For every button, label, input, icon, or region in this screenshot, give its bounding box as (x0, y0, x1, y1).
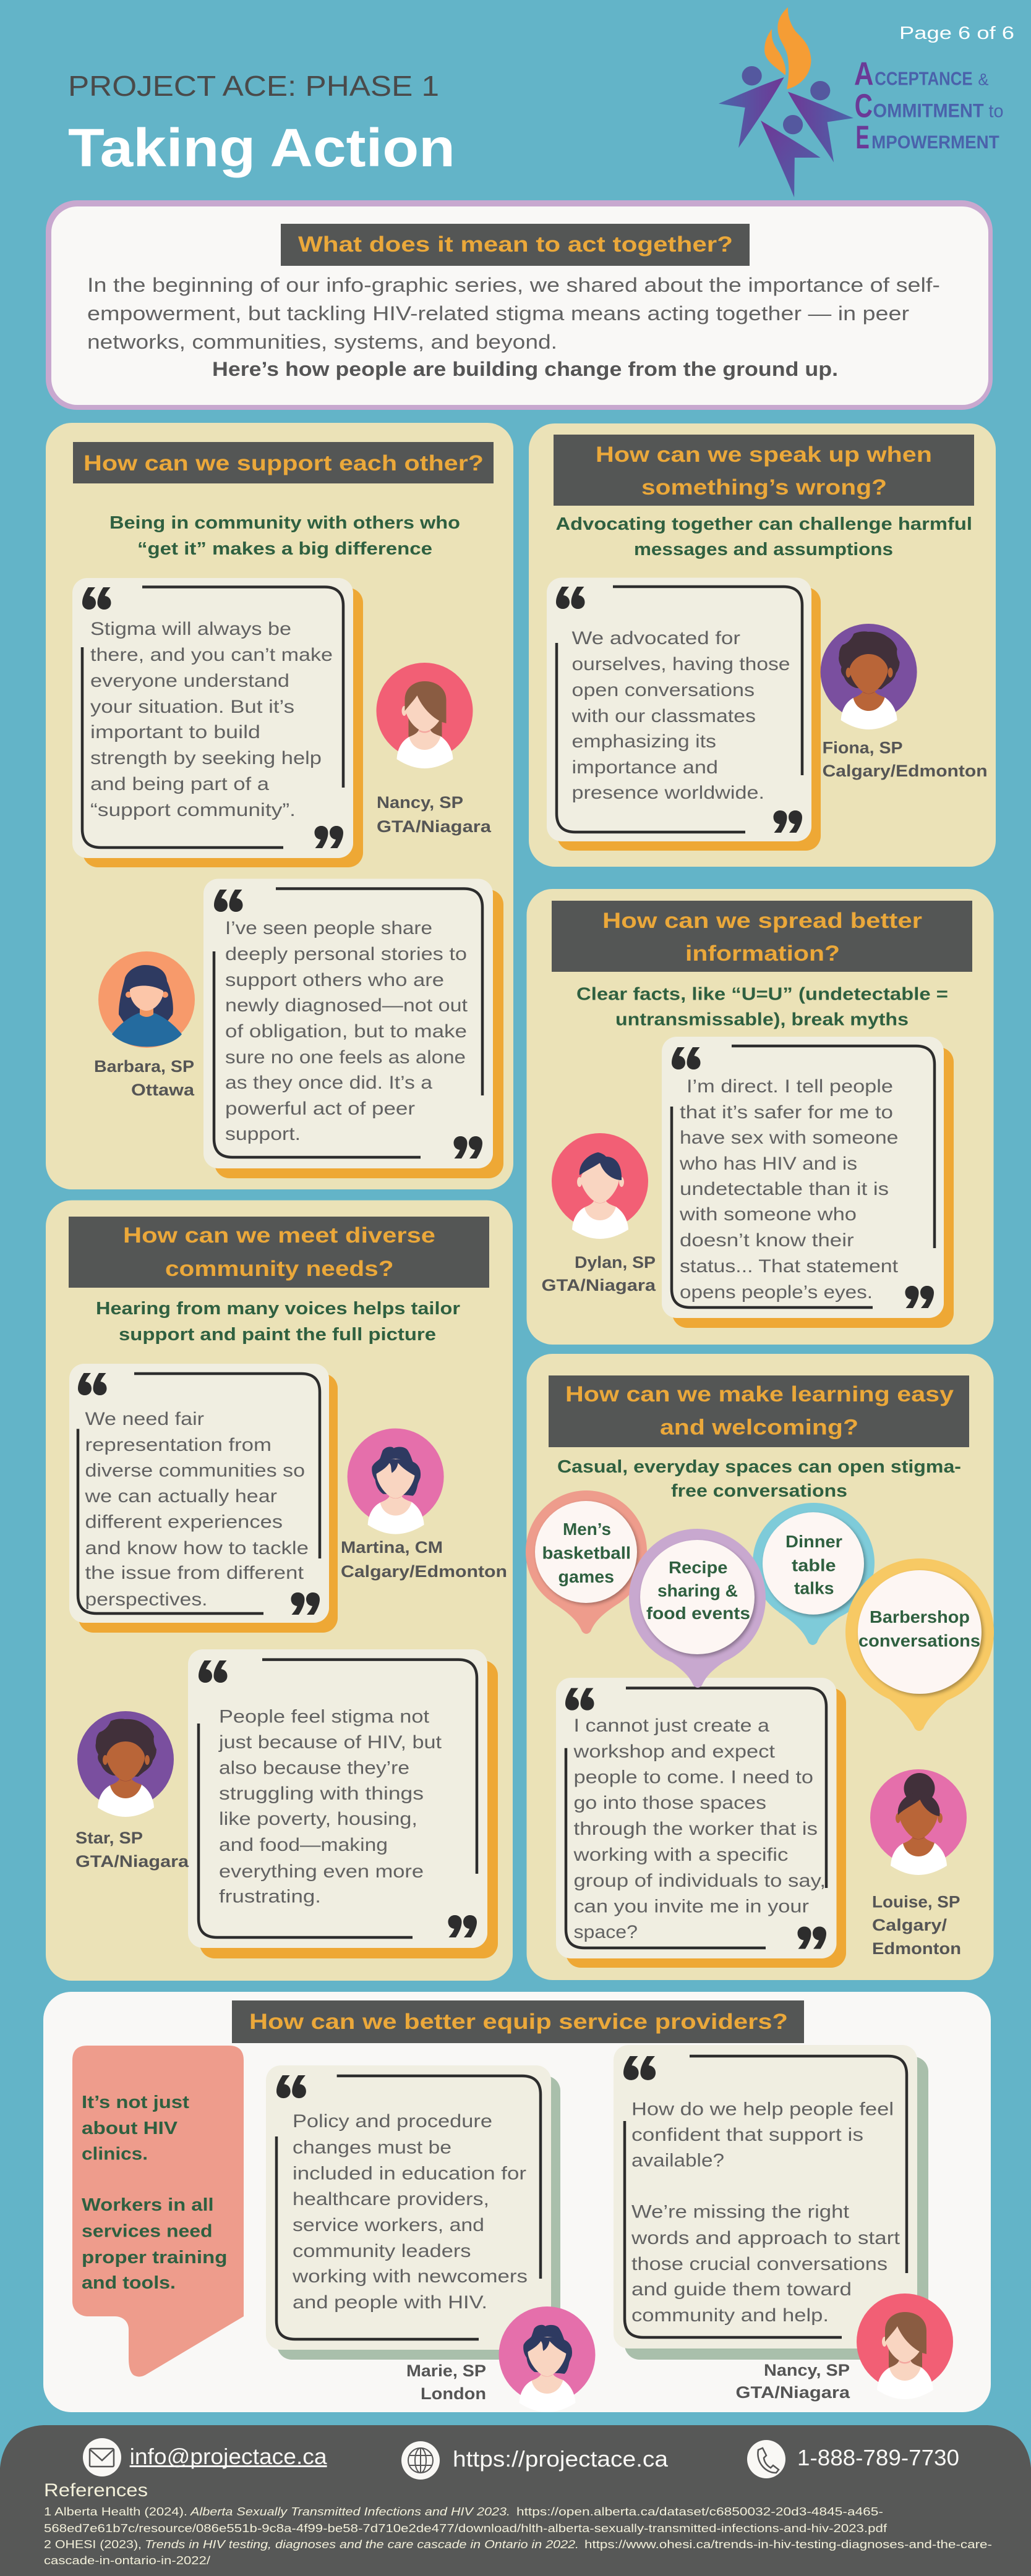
subheading: Casual, everyday spaces can open stigma- (557, 1457, 961, 1477)
callout: not just about HIV clinics: Workers in all (82, 2195, 214, 2215)
quote text: included in education for (293, 2164, 526, 2183)
avatar: Fiona (821, 624, 917, 729)
subheading: free conversations (671, 1481, 847, 1501)
avatar: Louise (870, 1769, 967, 1875)
logo: ACE: CCEPTANCE (875, 68, 973, 89)
callout: not just about HIV clinics: proper training (82, 2248, 228, 2268)
heading (73, 442, 494, 483)
subheading: Advocating together can challenge harmful (555, 514, 972, 534)
quote text: confident that support is (631, 2125, 863, 2145)
panel: how can we make learning easy and welcoming (526, 1354, 994, 1980)
avatar: Barbara (98, 951, 195, 1048)
heading (232, 2000, 804, 2043)
contact: email (83, 2438, 328, 2476)
name: Barbara (94, 1057, 195, 1099)
callout: not just about HIV clinics: and tools. (82, 2273, 176, 2293)
heading (554, 435, 974, 506)
quote text: healthcare providers, (293, 2189, 489, 2209)
name: Nancy (736, 2361, 850, 2402)
quote text: community leaders (293, 2241, 471, 2261)
callout: not just about HIV clinics: clinics. (82, 2144, 148, 2164)
bubble: barbershop conversations (845, 1558, 994, 1731)
references list: https://open.alberta.ca/dataset/c6850032-20d3-4845-a465- (516, 2506, 883, 2518)
quote text (218, 1707, 442, 1907)
name: Nancy: Nancy, SP (377, 793, 463, 812)
quote text: just because of HIV, but (218, 1732, 442, 1753)
name: Star: GTA/Niagara (75, 1852, 189, 1871)
title: Taking Action (68, 118, 455, 178)
heading: How can we speak up when (596, 443, 932, 467)
logo: ACE: OMMITMENT (873, 100, 984, 121)
heading: How can we support each other? (83, 451, 484, 475)
name: Fiona: Calgary/Edmonton (823, 762, 988, 780)
name: Louise: Louise, SP (872, 1893, 960, 1911)
quote text: words and approach to start (631, 2228, 901, 2248)
subheading (96, 1299, 460, 1345)
logo: ACE: to (989, 101, 1004, 121)
quote card: Star (188, 1649, 498, 1958)
name: Martina: Calgary/Edmonton (341, 1562, 507, 1581)
heading: How can we meet diverse (123, 1223, 435, 1248)
eyebrow: project and phase: PROJECT ACE: PHASE 1 (68, 70, 439, 102)
quote text: and guide them toward (631, 2279, 852, 2300)
quote text: that it’s safer for me to (680, 1102, 893, 1123)
quote text: Policy and procedure (293, 2111, 492, 2132)
quote text: frustrating. (219, 1887, 321, 1907)
avatar: Marie (498, 2306, 595, 2412)
quote text: and people with HIV. (293, 2292, 487, 2313)
quote text: struggling with things (219, 1783, 424, 1804)
quote text: newly diagnosed—not out (225, 995, 468, 1016)
quote text: have sex with someone (680, 1128, 898, 1148)
subheading: Hearing from many voices helps tailor (96, 1299, 460, 1319)
name: Barbara: Ottawa (131, 1081, 195, 1099)
bubble: dinner table talks: table (792, 1556, 836, 1575)
name: Marie: Marie, SP (406, 2361, 486, 2380)
quote text (571, 628, 790, 803)
quote text: go into those spaces (574, 1793, 766, 1813)
name: Nancy: GTA/Niagara (377, 817, 492, 836)
quote text: like poverty, housing, (219, 1809, 417, 1829)
heading (69, 1217, 489, 1288)
bubble: dinner table talks: talks (794, 1579, 834, 1597)
quote card: Louise (556, 1678, 846, 1968)
quote text: diverse communities so (85, 1460, 305, 1481)
intro text: In the beginning of our info-graphic series, we shared about the importance of self- (87, 274, 940, 296)
quote text (225, 918, 468, 1144)
name: Barbara: Barbara, SP (94, 1057, 194, 1076)
quote text: We’re missing the right (631, 2202, 850, 2222)
name: Star (75, 1829, 189, 1871)
quote text: workshop and expect (573, 1741, 776, 1762)
subheading: “get it” makes a big difference (137, 539, 432, 559)
quote card: Fiona (547, 577, 821, 851)
quote text: changes must be (293, 2138, 451, 2158)
name: Dylan: Dylan, SP (575, 1253, 656, 1272)
quote text: working with newcomers (292, 2266, 528, 2287)
quote text (84, 1409, 309, 1610)
callout: not just about HIV clinics (72, 2046, 244, 2377)
quote text: powerful act of peer (225, 1099, 415, 1119)
heading (281, 224, 750, 266)
panel: how can we better equip service providers (43, 1992, 991, 2412)
quote text: status... That statement (680, 1256, 899, 1277)
quote card: Dylan (662, 1037, 954, 1328)
quote text: of obligation, but to make (225, 1021, 467, 1042)
quote text: We need fair (85, 1409, 204, 1429)
panel: how can we spread better information (527, 889, 993, 1345)
bubble: men's basketball games: games (558, 1567, 614, 1586)
subheading (555, 514, 972, 559)
quote text: support others who are (225, 970, 444, 990)
quote text (573, 1715, 826, 1942)
contact: phone: 1-888-789-7730 (797, 2445, 959, 2470)
quote card: Marie (266, 2065, 560, 2360)
quote text: everyone understand (90, 671, 289, 691)
logo: ACE: MPOWERMENT (871, 132, 999, 153)
quote text (679, 1076, 899, 1303)
bubble: dinner table talks: Dinner (785, 1532, 842, 1551)
bubble: recipe sharing and food events: sharing & (657, 1581, 738, 1600)
logo: ACE: C (855, 88, 873, 124)
quote text: community and help. (631, 2305, 829, 2326)
bubble: dinner table talks (753, 1503, 875, 1645)
quote text: We advocated for (571, 628, 740, 648)
quote text: through the worker that is (574, 1819, 818, 1839)
quote text: and food—making (219, 1835, 388, 1855)
heading (549, 1375, 969, 1447)
name: Nancy: GTA/Niagara (736, 2383, 850, 2402)
logo: ACE: E (855, 120, 870, 156)
avatar: Nancy (857, 2293, 953, 2399)
quote text: there, and you can’t make (90, 645, 333, 665)
subheading: messages and assumptions (634, 540, 893, 559)
subheading: support and paint the full picture (119, 1325, 436, 1345)
quote text: sure no one feels as alone (225, 1047, 466, 1068)
quote text: group of individuals to say, (574, 1871, 826, 1891)
logo: ACE: & (978, 70, 989, 88)
avatar: Star (77, 1711, 174, 1817)
intro text: networks, communities, systems, and beyond. (87, 331, 557, 353)
footer (0, 2425, 1031, 2576)
quote card: Martina (69, 1364, 338, 1633)
quote text: support. (225, 1124, 301, 1144)
quote text (90, 619, 333, 820)
references list (44, 2506, 992, 2567)
quote text: with someone who (679, 1204, 857, 1225)
logo: ACE: A (854, 56, 874, 92)
quote text: importance and (571, 757, 718, 778)
quote text: the issue from different (85, 1563, 304, 1583)
quote text: presence worldwide. (571, 783, 764, 803)
heading: How can we spread better (602, 909, 922, 933)
panel: how can we meet diverse community needs (46, 1201, 513, 1981)
quote text: space? (574, 1922, 638, 1942)
contact: email: info@projectace.ca (130, 2444, 328, 2469)
references list: 568ed7e61b7c/resource/086e551b-9c8a-4f99-be58-7d710e2de477/download/hlth-alberta-sexually-transmitted-infections-and-hiv-2023.pdf (44, 2522, 888, 2535)
heading: something’s wrong? (641, 475, 887, 499)
subheading (576, 985, 948, 1030)
contact: phone (747, 2440, 959, 2478)
name: Star: Star, SP (75, 1829, 143, 1847)
avatar: Nancy (376, 663, 473, 768)
bubble: recipe sharing and food events: food events (646, 1604, 750, 1623)
quote text: strength by seeking help (90, 748, 322, 768)
callout: not just about HIV clinics: services need (82, 2222, 213, 2242)
quote text: deeply personal stories to (225, 944, 467, 964)
quote text: opens people’s eyes. (680, 1282, 873, 1303)
quote text: representation from (85, 1435, 272, 1455)
heading (552, 901, 972, 972)
quote text: and know how to tackle (85, 1538, 309, 1558)
avatar: Martina (348, 1429, 444, 1534)
quote text: I’ve seen people share (225, 918, 432, 938)
bubble: barbershop conversations: conversations (858, 1631, 980, 1651)
subheading: untransmissable), break myths (615, 1010, 909, 1030)
name: Dylan: GTA/Niagara (542, 1276, 656, 1294)
intro text (87, 274, 940, 380)
panel: what does it mean to act together (46, 200, 993, 410)
quote text: I’m direct. I tell people (687, 1076, 893, 1097)
name: Louise: Calgary/ (872, 1916, 948, 1934)
quote text: your situation. But it’s (90, 697, 294, 717)
name: Nancy: Nancy, SP (764, 2361, 850, 2379)
references list: Alberta Sexually Transmitted Infections and HIV 2023. (190, 2506, 510, 2518)
references list: Trends in HIV testing, diagnoses and the care cascade in Ontario in 2022. (145, 2538, 579, 2551)
heading: How can we make learning easy (565, 1382, 954, 1406)
quote text: ourselves, having those (571, 654, 790, 674)
quote text: different experiences (85, 1512, 283, 1532)
panel: how can we support each other (46, 423, 513, 1189)
name: Fiona: Fiona, SP (823, 739, 903, 757)
quote text: perspectives. (85, 1589, 208, 1610)
heading: community needs? (165, 1257, 393, 1281)
quote text: important to build (90, 722, 260, 742)
name: Dylan (542, 1253, 656, 1294)
quote text: we can actually hear (84, 1486, 277, 1507)
quote text: service workers, and (293, 2215, 484, 2235)
bubble: barbershop conversations: Barbershop (870, 1607, 970, 1626)
heading: information? (685, 942, 840, 966)
heading: What does it mean to act together? (298, 232, 733, 257)
quote text (631, 2099, 901, 2326)
references list: 1 Alberta Health (2024). (44, 2506, 187, 2518)
quote text: can you invite me in your (574, 1897, 809, 1917)
title block (68, 70, 455, 178)
quote text: undetectable than it is (680, 1179, 889, 1199)
intro text: Here’s how people are building change from the ground up. (212, 358, 838, 380)
subheading (109, 513, 460, 559)
name: Martina: Martina, CM (341, 1538, 443, 1557)
references list: 2 OHESI (2023), (44, 2538, 142, 2551)
references heading: References (44, 2480, 148, 2501)
quote text: everything even more (219, 1861, 424, 1882)
bubble: recipe sharing and food events (629, 1529, 766, 1688)
quote text: emphasizing its (571, 731, 716, 752)
bubble: recipe sharing and food events: Recipe (669, 1558, 727, 1577)
callout: not just about HIV clinics: about HIV (82, 2119, 178, 2138)
quote text: available? (631, 2151, 724, 2171)
quote text: How do we help people feel (631, 2099, 894, 2119)
page number: Page 6 of 6 (899, 23, 1014, 43)
quote card: Nancy (614, 2045, 928, 2360)
quote text: also because they’re (219, 1758, 409, 1778)
contact: website: https://projectace.ca (453, 2446, 669, 2472)
quote text: and being part of a (90, 774, 269, 794)
subheading: Being in community with others who (109, 513, 460, 533)
bubble: men's basketball games: Men’s (563, 1520, 611, 1539)
subheading: Clear facts, like “U=U” (undetectable = (576, 985, 948, 1005)
avatar: Dylan (552, 1133, 648, 1239)
quote text: People feel stigma not (219, 1707, 430, 1727)
references list: cascade-in-ontario-in-2022/ (44, 2554, 210, 2567)
logo: ACE (719, 7, 1004, 197)
quote text: doesn’t know their (680, 1230, 854, 1251)
subheading (557, 1457, 961, 1501)
quote text: I cannot just create a (574, 1715, 769, 1736)
bubble: men's basketball games: basketball (542, 1544, 631, 1563)
heading: and welcoming? (660, 1416, 858, 1440)
panel: how can we speak up (529, 423, 996, 867)
callout: not just about HIV clinics: It’s not just (82, 2093, 189, 2112)
intro text: empowerment, but tackling HIV-related stigma means acting together — in peer (87, 302, 909, 325)
quote card: Barbara (203, 879, 503, 1178)
quote text: working with a specific (573, 1845, 788, 1865)
references list: https://www.ohesi.ca/trends-in-hiv-testing-diagnoses-and-the-care- (584, 2538, 992, 2551)
quote text: with our classmates (571, 706, 756, 726)
quote text: as they once did. It’s a (225, 1073, 432, 1093)
quote text: who has HIV and is (679, 1154, 857, 1174)
quote text: “support community”. (90, 800, 296, 820)
quote text: Stigma will always be (90, 619, 291, 639)
quote text: people to come. I need to (574, 1767, 813, 1788)
name: Nancy (377, 793, 492, 836)
name: Martina (341, 1538, 507, 1581)
heading: How can we better equip service providers? (249, 2010, 788, 2034)
name: Marie (406, 2361, 486, 2403)
quote text: those crucial conversations (631, 2254, 888, 2274)
name: Louise: Edmonton (872, 1939, 961, 1958)
quote card: Nancy (72, 578, 363, 867)
name: Fiona (823, 739, 988, 780)
quote text (292, 2111, 528, 2313)
contact: website (401, 2441, 669, 2480)
name: Louise (872, 1893, 961, 1958)
bubble: men's basketball games (526, 1490, 647, 1634)
quote text: open conversations (571, 680, 755, 700)
name: Marie: London (421, 2384, 486, 2403)
